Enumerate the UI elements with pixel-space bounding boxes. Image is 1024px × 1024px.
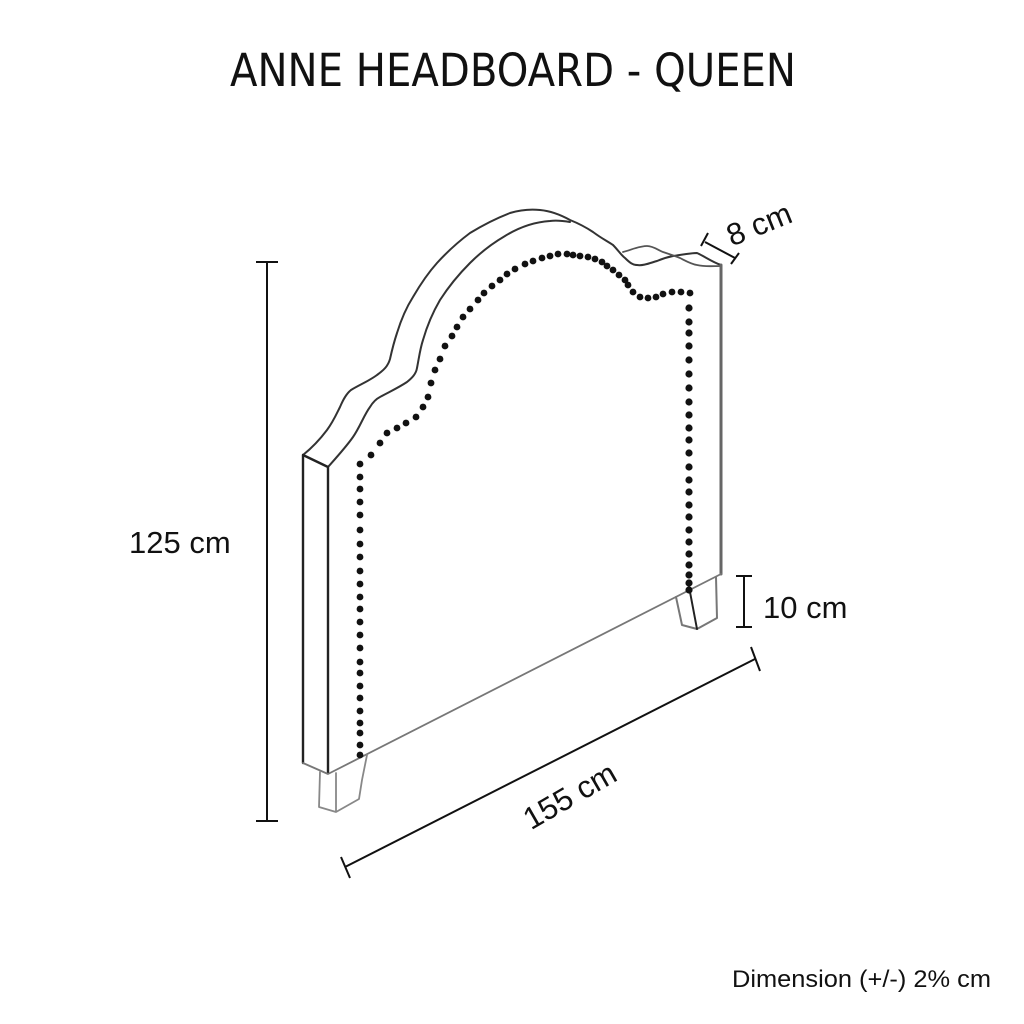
footnote: Dimension (+/-) 2% cm xyxy=(732,966,991,993)
bottom edge xyxy=(303,574,721,774)
dimension: width 155 cm: 155 cm xyxy=(517,755,623,836)
nailhead studs xyxy=(357,251,693,758)
title: ANNE HEADBOARD - QUEEN xyxy=(230,44,796,97)
top right wave xyxy=(623,246,721,266)
dimension: height 125 cm xyxy=(129,262,278,821)
right leg xyxy=(676,577,717,629)
left leg xyxy=(319,755,367,812)
dimension: leg height 10 cm: 10 cm xyxy=(763,590,847,625)
right leg front corner xyxy=(690,592,697,629)
dimension: height 125 cm: 125 cm xyxy=(129,525,231,560)
dimension: depth 8 cm: 8 cm xyxy=(721,195,797,253)
left end panel xyxy=(303,455,328,773)
dimension: leg height 10 cm xyxy=(736,576,847,627)
front edge outline xyxy=(328,221,570,467)
right edge xyxy=(720,265,722,574)
dimension: depth 8 cm xyxy=(701,195,797,264)
dimension: width 155 cm xyxy=(341,647,760,878)
headboard line drawing xyxy=(303,210,721,812)
back edge outline xyxy=(303,210,721,455)
